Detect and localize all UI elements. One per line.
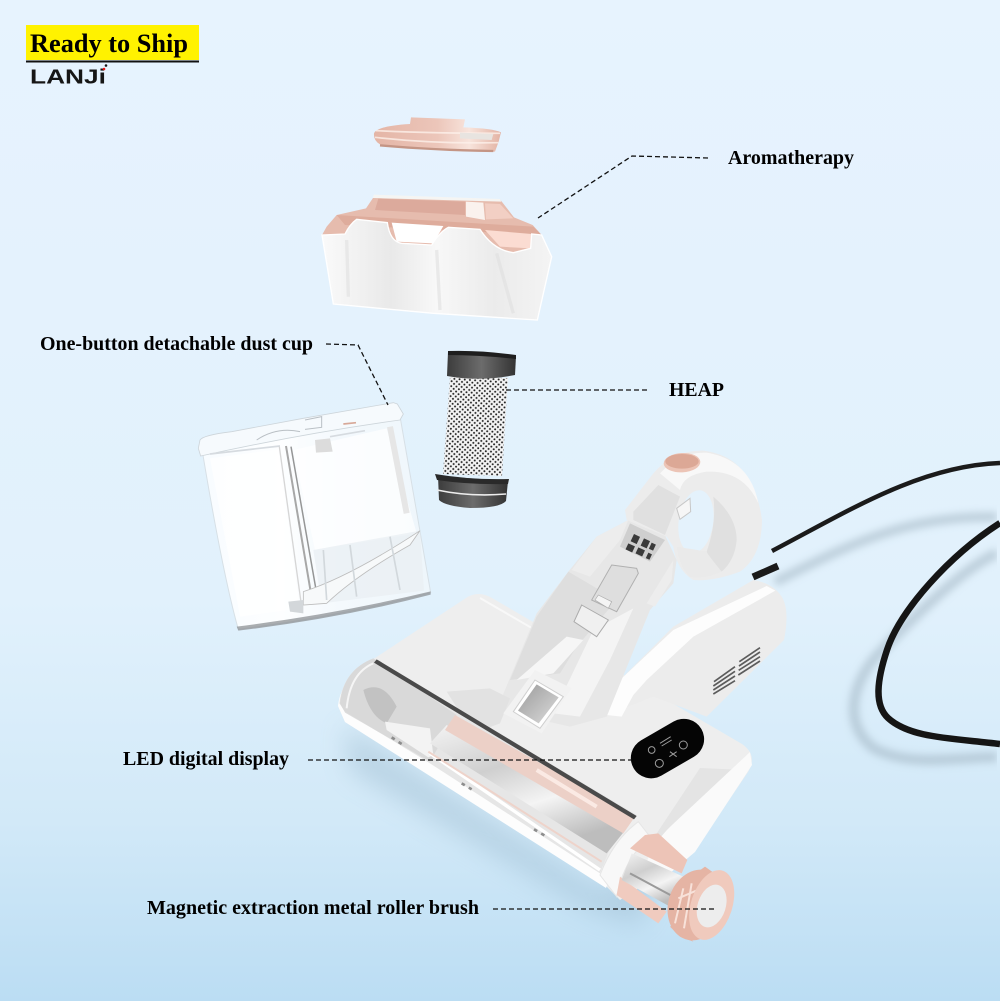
power cord	[753, 463, 1000, 760]
part: transparent dust cup	[198, 403, 431, 631]
logo: LANJi: LANJi	[30, 66, 106, 88]
highlight band	[607, 586, 775, 717]
label: Aromatherapy: Aromatherapy	[728, 147, 855, 169]
transparent handle column	[497, 520, 677, 727]
handle ring	[625, 451, 762, 580]
logo: LANJi	[30, 64, 107, 88]
clear roller window with roller inside	[339, 658, 712, 897]
vents	[713, 648, 760, 694]
socket	[503, 670, 572, 733]
latch clip	[592, 565, 638, 612]
badge: Ready to Ship: Ready to Ship	[30, 28, 188, 58]
roller brush end cap	[617, 833, 742, 948]
part: aromatherapy cartridge	[374, 117, 501, 152]
window end bezel	[347, 663, 373, 708]
cap body	[659, 862, 735, 948]
part: rear body and handle	[447, 451, 787, 733]
label: HEAP: HEAP	[669, 379, 724, 401]
label: One-button detachable dust cup: One-button detachable dust cup	[40, 333, 313, 355]
cap face	[681, 864, 742, 946]
label: Aromatherapy	[538, 147, 855, 218]
neck	[633, 485, 680, 535]
pink shield	[630, 833, 687, 873]
pink sleeve	[445, 715, 635, 833]
part: HEPA filter	[435, 351, 516, 508]
rear motor housing	[607, 580, 787, 717]
exposed shaft	[622, 853, 683, 907]
window dark top edge	[374, 659, 637, 819]
part: vacuum head	[338, 594, 752, 900]
part: lid with pink trim	[322, 195, 552, 320]
pink power button	[663, 452, 701, 473]
duct base	[447, 688, 510, 733]
label: LED digital display: LED digital display	[123, 748, 290, 770]
vacuum drop shadow	[345, 725, 660, 925]
display pill	[623, 711, 712, 786]
ring hole	[674, 488, 718, 555]
roller silver body	[430, 725, 627, 853]
label: One-button detachable dust cup	[40, 333, 388, 405]
head end bezel	[600, 822, 650, 897]
grille window	[620, 523, 665, 562]
label: Magnetic extraction metal roller brush: Magnetic extraction metal roller brush	[147, 897, 480, 919]
